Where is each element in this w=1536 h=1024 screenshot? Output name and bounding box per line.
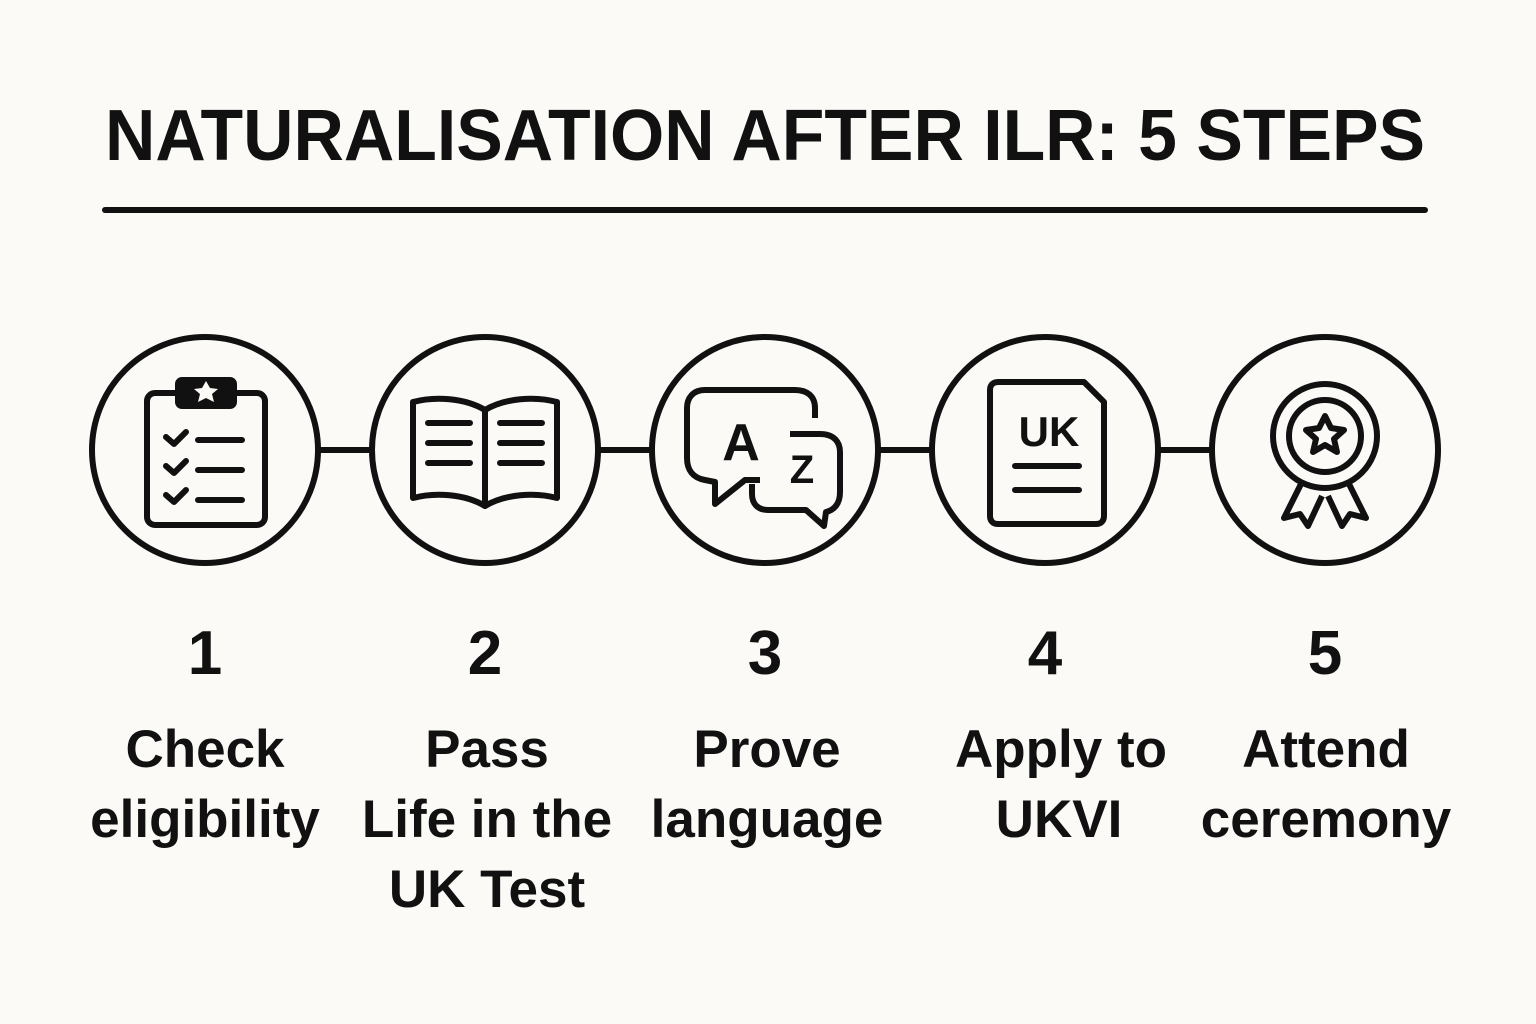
step labels — [90, 720, 1452, 919]
step labels: Life in the — [362, 790, 612, 849]
step 3: prove language: Z — [790, 448, 814, 492]
icon: open book — [413, 399, 557, 506]
step labels: UKVI — [996, 790, 1122, 849]
icon: speech bubbles A-Z — [687, 390, 840, 526]
step labels: Apply to — [955, 720, 1167, 779]
step 3: prove language: A — [722, 414, 760, 472]
connectors — [318, 447, 1212, 453]
step numbers — [188, 619, 1342, 688]
step 1: check eligibility — [92, 337, 318, 563]
icon: UK document — [990, 382, 1104, 524]
step 4: apply to UKVI — [932, 337, 1158, 563]
step 3: prove language — [652, 337, 878, 563]
step labels: Prove — [693, 720, 841, 779]
title: NATURALISATION AFTER ILR: 5 STEPS — [105, 96, 1425, 176]
icon: clipboard — [147, 380, 265, 525]
step 2: life in the UK test — [372, 337, 598, 563]
step labels: language — [651, 790, 883, 849]
step numbers: 2 — [468, 619, 502, 688]
step numbers: 3 — [748, 619, 782, 688]
step labels: Check — [125, 720, 285, 779]
icon: rosette — [1273, 384, 1377, 526]
step labels: UK Test — [389, 860, 585, 919]
step labels: Attend — [1242, 720, 1410, 779]
step numbers: 1 — [188, 619, 222, 688]
step numbers: 4 — [1028, 619, 1063, 688]
step 5: attend ceremony — [1212, 337, 1438, 563]
step numbers: 5 — [1308, 619, 1342, 688]
step labels: ceremony — [1201, 790, 1452, 849]
step labels: Pass — [425, 720, 549, 779]
step labels: eligibility — [90, 790, 320, 849]
step 4: apply to UKVI: UK — [1019, 408, 1079, 455]
